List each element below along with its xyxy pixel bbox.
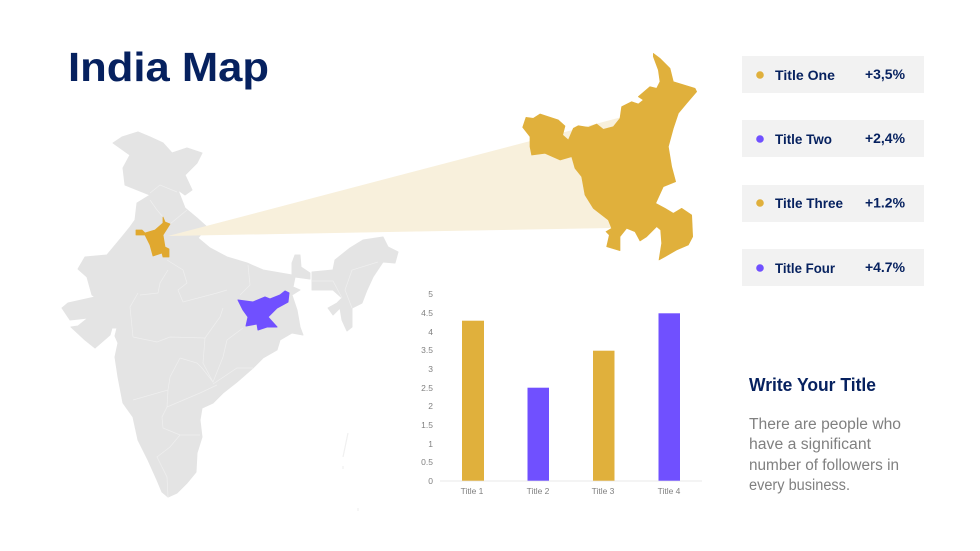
panel: Title One [742,56,924,93]
bar: Title 3 [593,351,614,481]
y axis labels: 3 [428,364,433,374]
y axis labels: 3.5 [421,345,433,355]
panel: Title Three [742,185,924,222]
y axis labels: 4.5 [421,308,433,318]
x axis labels: Title 4 [658,486,681,496]
text block body: number of followers in [749,457,899,474]
x axis labels: Title 2 [527,486,550,496]
panel: Title Two: Title Two [775,131,832,147]
text block body: have a significant [749,436,872,453]
y axis labels: 5 [428,289,433,299]
title: India Map [68,44,269,90]
panel: Title Three: Title Three [775,195,843,211]
x axis labels: Title 3 [592,486,615,496]
text block heading: Write Your Title [749,375,876,395]
panel: Title Two [742,120,924,157]
panel: Title Three: +1.2% [865,194,906,210]
panel: Title Two: +2,4% [865,130,906,146]
callout projection beam [168,117,622,236]
x axis labels [461,486,681,496]
y axis labels: 0.5 [421,457,433,467]
y axis labels: 4 [428,327,433,337]
y axis labels [421,289,433,486]
Andaman islands [343,433,358,511]
map: India [62,132,398,511]
bar: Title 1 [462,321,484,481]
y axis labels: 1 [428,439,433,449]
north-east India [312,237,398,331]
y axis labels: 2.5 [421,383,433,393]
panel: Title Four: Title Four [775,260,836,276]
panel: Title One: Title One [775,67,835,83]
text block body: every business. [749,477,850,494]
y axis labels: 0 [428,476,433,486]
bar: Title 2 [528,388,549,481]
highlight: Haryana on map [136,217,170,257]
panel: Title One: +3,5% [865,66,906,82]
mainland India [62,132,310,497]
bar chart [421,289,702,496]
x axis labels: Title 1 [461,486,484,496]
enlarged Haryana shape [523,53,697,260]
text block body [749,416,901,494]
panel: Title Four: +4.7% [865,259,906,275]
y axis labels: 2 [428,401,433,411]
panel: Title Four [742,249,924,286]
text block body: There are people who [749,416,901,433]
bar: Title 4 [658,313,680,481]
y axis labels: 1.5 [421,420,433,430]
highlight: Jharkhand on map [238,291,289,330]
